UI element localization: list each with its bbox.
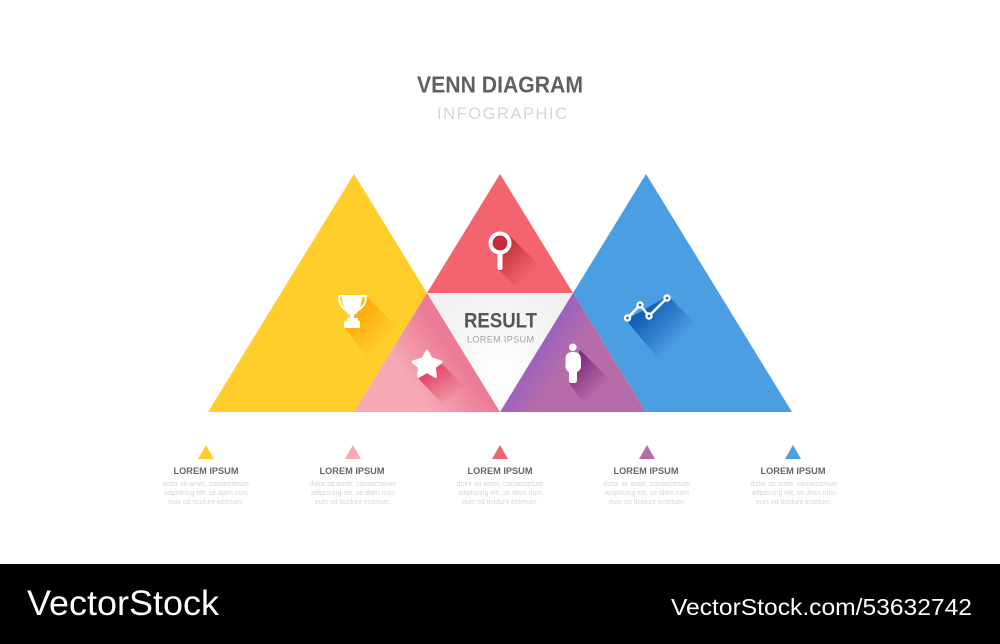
legend item: pink: [310, 445, 397, 506]
legend item: yellow: LOREM IPSUM: [174, 466, 238, 476]
icon: trophy: [339, 295, 412, 374]
legend item: red: euis od ticidunt ectetuer.: [462, 499, 538, 506]
legend item: pink: euis od ticidunt ectetuer.: [315, 499, 391, 506]
title: VENN DIAGRAM: [417, 72, 583, 98]
legend item: red: dolor sit amet, consectetuer: [456, 481, 544, 488]
legend item: blue: LOREM IPSUM: [760, 466, 826, 476]
icon: person: [566, 344, 622, 412]
legend item: red: adipiscing elit, se diam num: [458, 490, 542, 497]
heading: result: RESULT: [464, 308, 537, 332]
text: result caption: LOREM IPSUM: [467, 334, 534, 344]
venn diagram: [208, 174, 792, 412]
panel: blue triangle: [573, 174, 792, 412]
panel: purple overlap: [500, 293, 646, 412]
legend item: pink: dolor sit amet, consectetuer: [310, 481, 397, 488]
icon: star: [413, 351, 484, 412]
legend item: yellow: [162, 445, 250, 506]
legend item: blue: [750, 445, 838, 506]
legend item: yellow: euis od ticidunt ectetuer.: [168, 499, 244, 506]
footer brand: VectorStock: [27, 584, 220, 623]
panel: result centre: [427, 293, 573, 412]
legend item: purple: euis od ticidunt ectetuer.: [609, 499, 685, 506]
legend item: purple: LOREM IPSUM: [614, 466, 678, 476]
legend item: red: [456, 445, 544, 506]
icon: line chart: [625, 296, 714, 380]
legend item: blue: euis od ticidunt ectetuer.: [756, 499, 832, 506]
legend item: blue: dolor sit amet, consectetuer: [750, 481, 838, 488]
legend item: pink: adipiscing elit, se diam num: [311, 490, 395, 497]
legend item: red: LOREM IPSUM: [468, 466, 532, 476]
subtitle: INFOGRAPHIC: [437, 105, 567, 123]
panel: pink overlap: [354, 293, 500, 412]
legend item: blue: adipiscing elit, se diam num: [752, 490, 836, 497]
icon: magnifier: [490, 234, 552, 293]
legend item: pink: LOREM IPSUM: [320, 466, 384, 476]
panel: red triangle: [427, 174, 573, 293]
legend item: yellow: adipiscing elit, se diam num: [164, 490, 248, 497]
legend item: yellow: dolor sit amet, consectetuer: [162, 481, 250, 488]
legend item: purple: dolor sit amet, consectetuer: [604, 481, 691, 488]
panel: yellow triangle: [208, 174, 427, 412]
legend item: purple: adipiscing elit, se diam num: [605, 490, 689, 497]
legend item: purple: [604, 445, 691, 506]
footer bar: [0, 564, 1000, 644]
footer url: VectorStock.com/53632742: [671, 594, 972, 620]
